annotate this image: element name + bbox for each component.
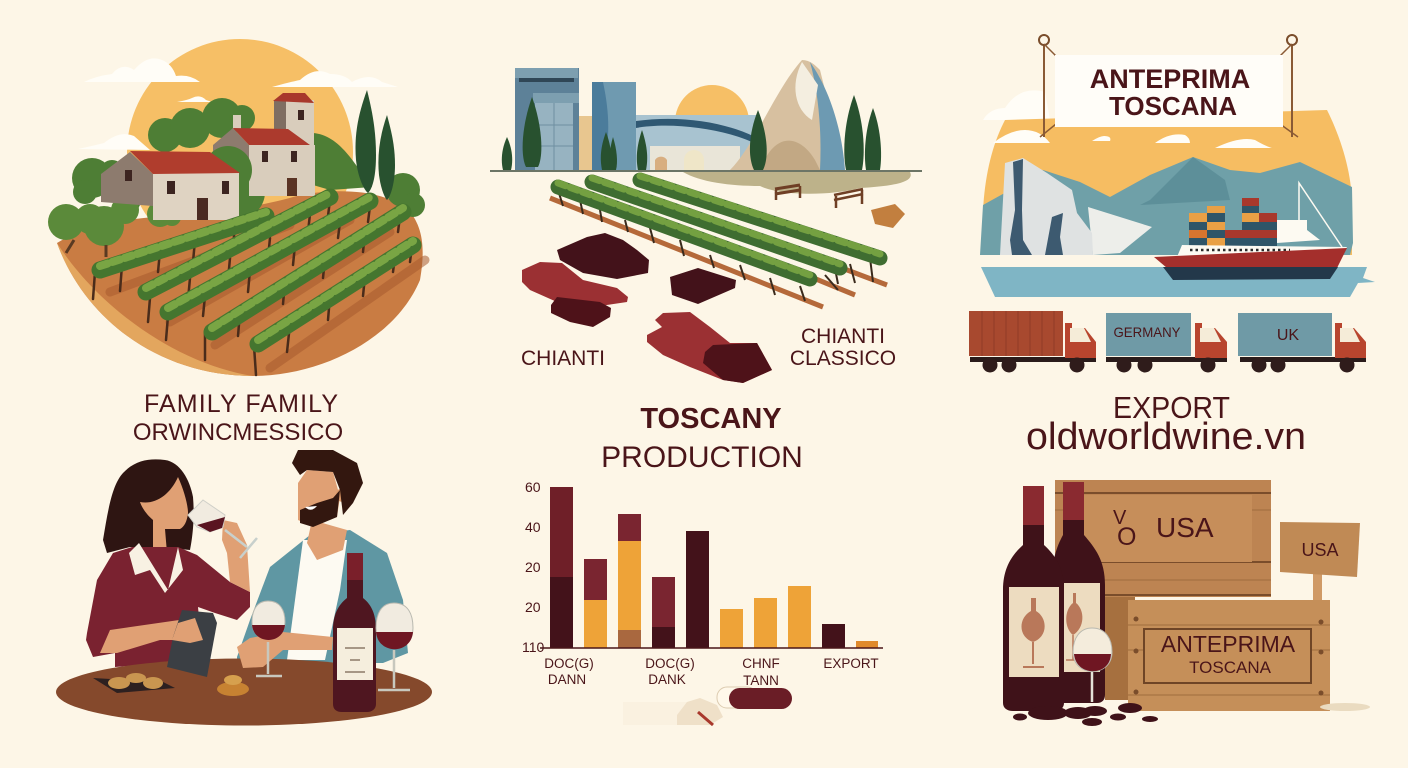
vineyard ground [57, 191, 423, 376]
wine glass: left [252, 601, 285, 676]
x axis labels: CHNF [742, 656, 780, 671]
truck: Germany: GERMANY [1114, 324, 1181, 340]
tree trunks [66, 240, 106, 257]
heading: family: FAMILY FAMILY [144, 390, 338, 418]
vine rows [550, 176, 887, 307]
heading: Toscany: TOSCANY [640, 403, 782, 435]
heading: export: EXPORT [1113, 390, 1230, 425]
wine glass: woman [188, 500, 257, 558]
label: Chianti Classico: CLASSICO [790, 347, 896, 370]
banner [1039, 35, 1298, 137]
olive ground [683, 172, 911, 194]
bar chart [522, 479, 883, 725]
map regions [522, 233, 772, 383]
wine bottle: front [1003, 486, 1064, 711]
man [237, 450, 408, 663]
panel: export scene [969, 35, 1375, 372]
back trees [72, 98, 425, 219]
label: Chianti: CHIANTI [521, 347, 605, 370]
label: Chianti Classico: CHIANTI [801, 325, 885, 348]
building: shell [730, 60, 845, 170]
banner: TOSCANA [1109, 91, 1237, 121]
woman's hand [172, 618, 203, 643]
mountains [980, 157, 1353, 255]
bars [550, 487, 878, 648]
sky [983, 110, 1352, 255]
crate: USA: USA [1156, 512, 1214, 543]
food board [93, 673, 249, 696]
x axis labels: DANN [548, 672, 586, 687]
icon: corkscrew and cork [623, 687, 792, 725]
hands [237, 632, 333, 668]
crate: Anteprima Toscana: ANTEPRIMA [1161, 631, 1296, 657]
front bushes [48, 196, 181, 246]
grapes [1013, 703, 1158, 726]
heading: production: PRODUCTION [601, 441, 803, 474]
y axis labels [522, 479, 545, 655]
benches [775, 185, 863, 208]
crate: Anteprima Toscana: TOSCANA [1189, 658, 1272, 677]
small clouds [993, 130, 1272, 148]
wine glass: right [376, 603, 413, 690]
ground shadow [1320, 703, 1370, 711]
y axis labels: 40 [525, 519, 541, 535]
truck: red [969, 311, 1096, 372]
y axis labels: 60 [525, 479, 541, 495]
x axis labels [544, 656, 879, 688]
dark wine pouch [167, 610, 217, 677]
crate [871, 204, 905, 228]
axis [540, 647, 883, 649]
panel: family vineyard [48, 39, 425, 376]
building: glass tower [515, 68, 593, 170]
building: blue tower [592, 82, 636, 170]
x axis labels: DOC(G) [645, 656, 695, 671]
wine bottle [333, 553, 376, 712]
sign: USA [1280, 522, 1360, 600]
banner: ANTEPRIMA [1090, 64, 1250, 94]
sign: USA: USA [1301, 540, 1339, 560]
wine glass [1073, 628, 1112, 702]
wine bottle: back [1052, 482, 1105, 703]
y axis labels: 20 [525, 599, 541, 615]
icon: clouds [78, 58, 398, 150]
x axis labels: DANK [648, 672, 686, 687]
woman [86, 459, 250, 667]
heading: family second line: ORWINCMESSICO [133, 419, 343, 446]
panel: Tuscany vineyards [490, 60, 922, 383]
crate: USA: O [1117, 523, 1136, 551]
panel: couple tasting wine [56, 450, 432, 726]
building: arcade [636, 115, 758, 170]
icon: clouds [983, 90, 1050, 120]
modern building [1000, 158, 1152, 255]
crate: USA [1055, 480, 1271, 700]
crate: Anteprima Toscana [1128, 600, 1330, 711]
horizon line [490, 170, 922, 172]
cypress trees [502, 95, 881, 170]
ground sunlit edge [57, 243, 253, 376]
sea [981, 267, 1375, 297]
cargo ship [1154, 183, 1347, 280]
y axis labels: 110 [522, 639, 545, 655]
farmhouse [101, 93, 315, 220]
heading: website: oldworldwine.vn [1026, 416, 1306, 458]
vine rows [93, 193, 425, 375]
x axis labels: TANN [743, 673, 779, 688]
cypress trees [355, 90, 395, 200]
y axis labels: 20 [525, 559, 541, 575]
truck: UK: UK [1277, 327, 1299, 344]
x axis labels: DOC(G) [544, 656, 594, 671]
icon: sun [127, 39, 353, 265]
truck: Germany [1106, 313, 1227, 372]
table [56, 658, 432, 726]
logo mark: V [1113, 507, 1127, 529]
icon: sun [675, 85, 749, 159]
truck: UK [1238, 313, 1366, 372]
panel: bottles and crates [1003, 480, 1370, 726]
x axis labels: EXPORT [823, 656, 879, 671]
